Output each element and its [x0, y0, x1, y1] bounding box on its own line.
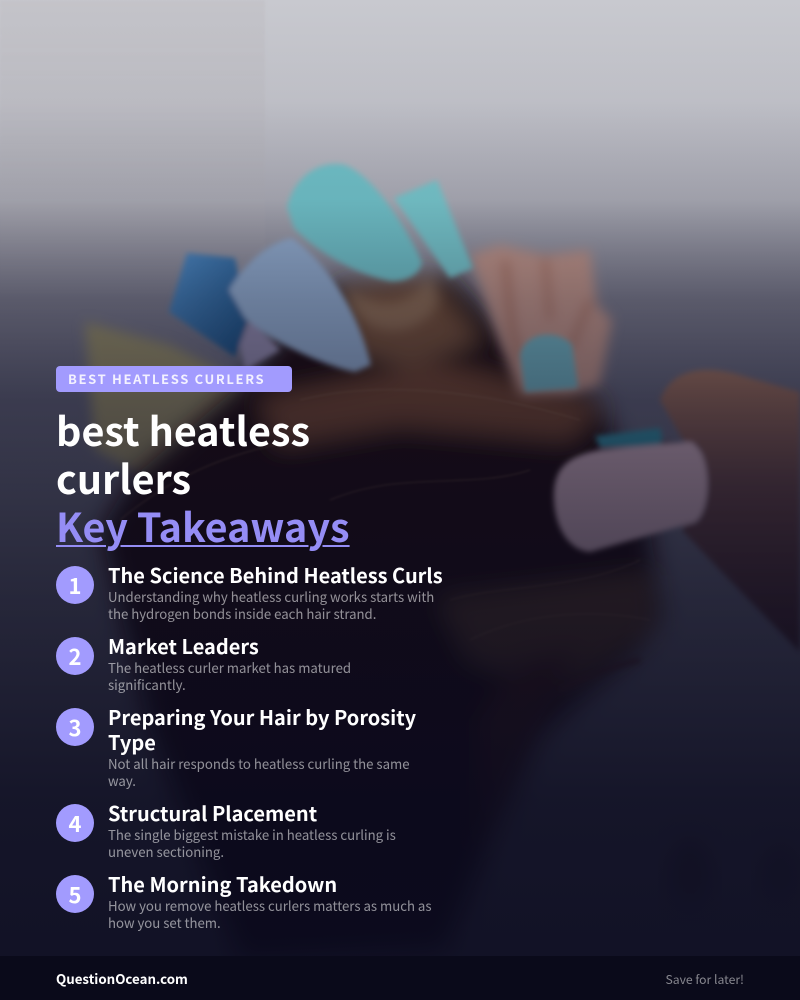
- item 1: The Science Behind Heatless Curls: [108, 560, 443, 589]
- item 3: Type: [108, 727, 156, 756]
- item 2: [56, 631, 351, 694]
- item 2: 2: [68, 640, 81, 672]
- wisps: [560, 660, 640, 690]
- title: best heatless: [56, 401, 310, 458]
- takeaway list: [56, 560, 443, 932]
- item 1: [56, 560, 443, 623]
- hand: [660, 370, 800, 652]
- hair strands: [120, 390, 650, 640]
- item 3: way.: [108, 771, 136, 790]
- small teal curler: [520, 335, 578, 392]
- title: Key Takeaways: [56, 497, 350, 554]
- yellow curler: [85, 322, 250, 500]
- item 3: 3: [68, 711, 81, 743]
- item 5: [56, 869, 432, 932]
- item 4: Structural Placement: [108, 798, 317, 827]
- item 2: Market Leaders: [108, 631, 259, 660]
- item 4: uneven sectioning.: [108, 842, 224, 861]
- tag: category badge: BEST HEATLESS CURLERS: [68, 369, 265, 388]
- tag: category badge: [56, 366, 292, 392]
- item 5: The Morning Takedown: [108, 869, 337, 898]
- item 1: Understanding why heatless curling works starts with: [108, 587, 434, 606]
- item 1: 1: [68, 569, 81, 601]
- title: curlers: [56, 449, 191, 506]
- grey clip: [240, 320, 280, 370]
- shadows low right: [670, 835, 710, 905]
- back teal curler: [394, 180, 473, 278]
- pink roller: [554, 442, 707, 552]
- hair mass: [100, 275, 662, 960]
- blue curler: [229, 238, 371, 372]
- hair highlight under teal curler: [345, 275, 440, 331]
- item 2: The heatless curler market has matured: [108, 658, 351, 677]
- footer call to action: Save for later!: [665, 970, 744, 988]
- title: [56, 401, 350, 554]
- item 1: the hydrogen bonds inside each hair strand.: [108, 604, 376, 623]
- item 4: 4: [68, 807, 81, 839]
- item 2: significantly.: [108, 675, 186, 694]
- teal strip: [595, 428, 664, 448]
- item 5: how you set them.: [108, 913, 221, 932]
- footer bar: [0, 956, 800, 1000]
- dark blue curler: [169, 253, 248, 357]
- item 5: How you remove heatless curlers matters as much as: [108, 896, 432, 915]
- item 4: The single biggest mistake in heatless curling is: [108, 825, 396, 844]
- footer brand: QuestionOcean.com: [56, 969, 188, 988]
- item 3: Preparing Your Hair by Porosity: [108, 702, 416, 731]
- item 5: 5: [68, 878, 81, 910]
- item 4: [56, 798, 396, 861]
- item 3: Not all hair responds to heatless curling the same: [108, 754, 410, 773]
- fingers: [470, 245, 612, 395]
- front teal curler: [287, 164, 422, 281]
- item 3: [56, 702, 416, 790]
